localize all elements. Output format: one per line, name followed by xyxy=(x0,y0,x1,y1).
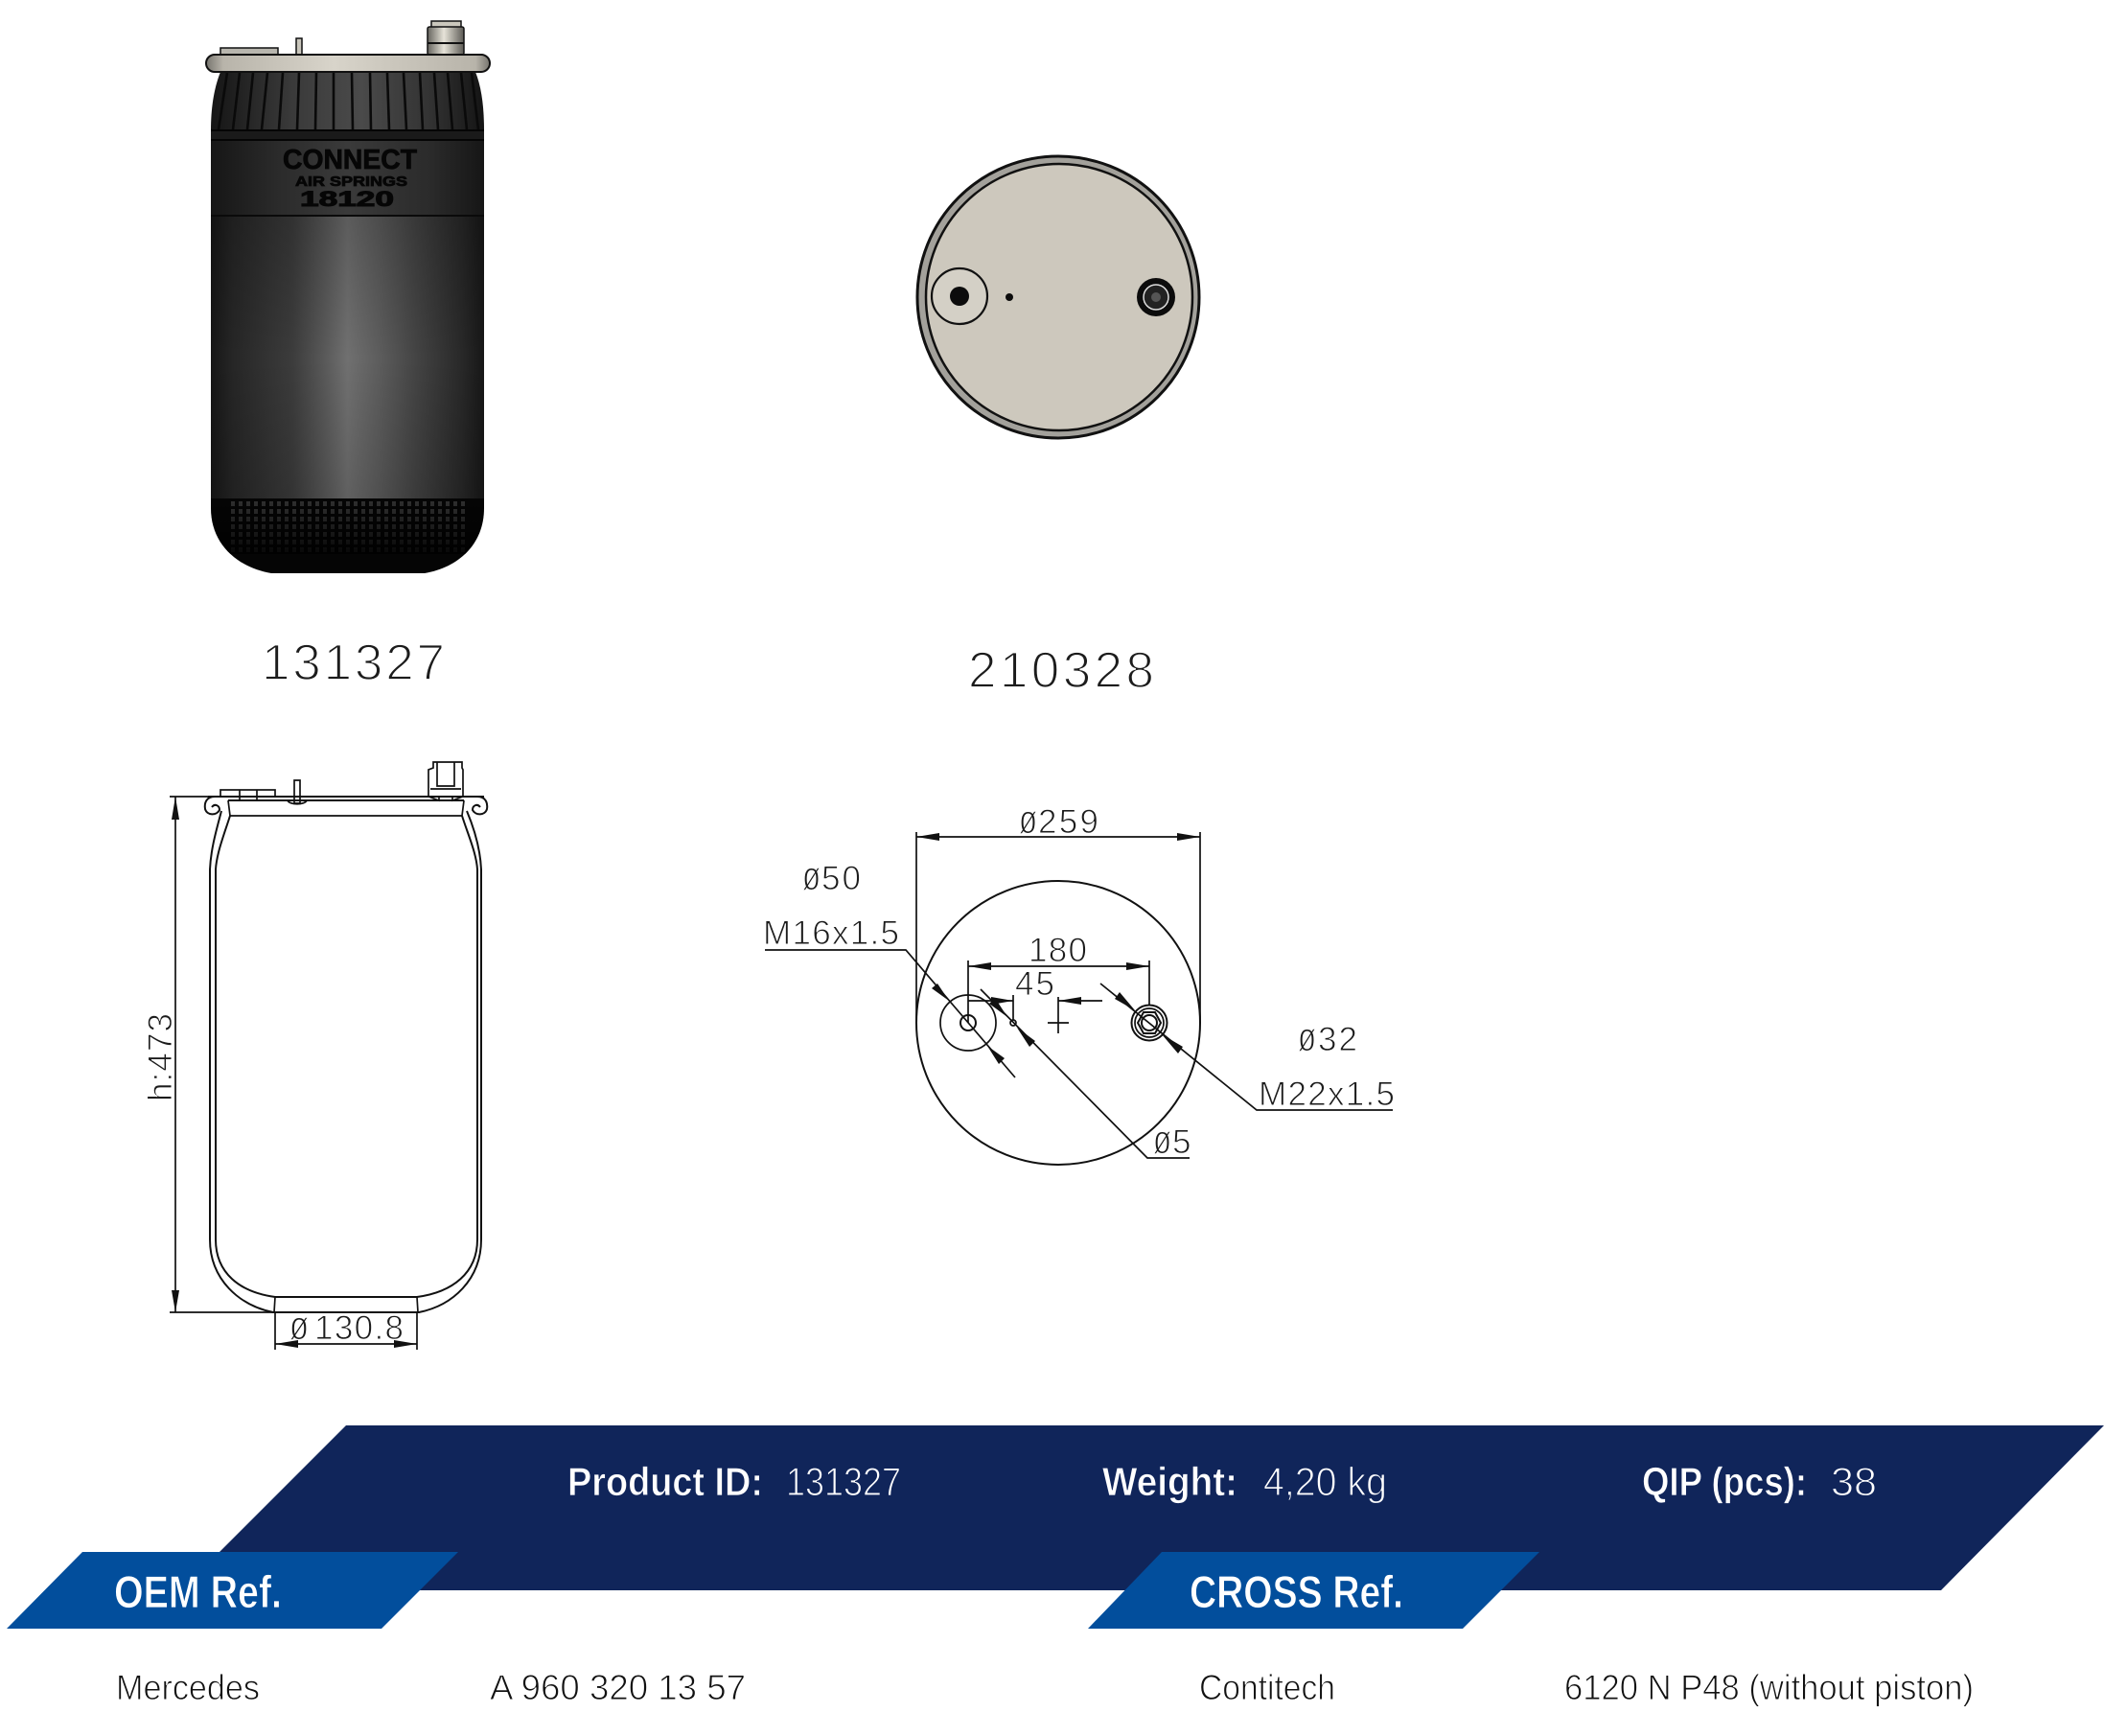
centre cross xyxy=(1048,997,1069,1033)
logo text on spring xyxy=(283,145,417,211)
part number label: 210328: 210328 xyxy=(968,642,1154,699)
height dimension h:473 xyxy=(142,797,274,1312)
leader ø5: ø xyxy=(1153,1117,1171,1162)
base dimension ø130.8: ø xyxy=(289,1303,309,1348)
leader M22x1.5 and ø32: 32 xyxy=(1318,1021,1357,1058)
inner plate xyxy=(926,164,1192,430)
air fitting xyxy=(428,21,464,55)
leader M22x1.5 and ø32: M22x1.5 xyxy=(1259,1076,1395,1113)
dimension 180 xyxy=(968,932,1149,1023)
dimension ø259: ø xyxy=(1019,797,1037,842)
leader M16x1.5 and ø50: ø xyxy=(802,853,821,898)
left port xyxy=(932,268,987,324)
dimension ø259 xyxy=(916,797,1200,1023)
plate circle xyxy=(916,881,1200,1165)
cross reference row: Contitech xyxy=(1199,1668,1335,1707)
tag: CROSS Ref.: CROSS Ref. xyxy=(1190,1566,1403,1617)
right curl xyxy=(473,797,487,814)
flange xyxy=(206,55,490,72)
OEM row xyxy=(116,1668,746,1707)
dimension drawing: top plate xyxy=(763,797,1395,1165)
spring body xyxy=(211,140,484,504)
fitting ø32 xyxy=(1131,1005,1168,1041)
qip: 38 xyxy=(1831,1459,1877,1504)
product id: 131327 xyxy=(786,1459,901,1504)
leader M16x1.5 and ø50: M16x1.5 xyxy=(763,914,899,952)
leader ø5 xyxy=(981,989,1191,1162)
dimension 180: 180 xyxy=(1029,932,1087,969)
dimension ø259: 259 xyxy=(1038,803,1098,841)
product id xyxy=(567,1459,901,1504)
leader M22x1.5 and ø32 xyxy=(1100,984,1395,1113)
top plate xyxy=(220,48,278,55)
leader M22x1.5 and ø32: ø xyxy=(1298,1014,1316,1059)
pin xyxy=(296,38,302,55)
height dimension h:473: h:473 xyxy=(142,1013,179,1101)
leader M16x1.5 and ø50: 50 xyxy=(821,860,861,897)
outline xyxy=(205,797,487,1312)
top plate and hardware xyxy=(220,762,463,804)
base dimension ø130.8: 130.8 xyxy=(314,1309,404,1347)
leader ø5: 5 xyxy=(1172,1123,1191,1161)
weight: 4,20 kg xyxy=(1263,1459,1387,1504)
right fitting xyxy=(1137,278,1175,316)
leader M16x1.5 and ø50 xyxy=(763,853,1015,1077)
dimension 45: 45 xyxy=(1015,965,1054,1003)
qip: QIP (pcs): xyxy=(1642,1459,1807,1504)
tag: CROSS Ref. xyxy=(1088,1552,1539,1629)
tag: OEM Ref. xyxy=(7,1552,458,1629)
small hole xyxy=(1006,293,1013,301)
product photo: air spring xyxy=(206,21,490,575)
logo text on spring: 18120 xyxy=(300,187,394,211)
cross reference row: 6120 N P48 (without piston) xyxy=(1564,1668,1974,1707)
ribbed upper section xyxy=(211,72,484,140)
logo band xyxy=(211,140,484,216)
outer rim xyxy=(917,156,1199,438)
port circle ø50 xyxy=(940,995,996,1051)
cross reference row xyxy=(1199,1668,1974,1707)
logo text on spring: AIR SPRINGS xyxy=(295,174,407,190)
left curl xyxy=(205,797,220,814)
weight xyxy=(1102,1459,1387,1504)
section drawing: air spring cross-section xyxy=(142,762,487,1350)
base dimension ø130.8 xyxy=(275,1303,417,1350)
info band xyxy=(181,1425,2104,1590)
logo text on spring: CONNECT xyxy=(283,145,417,175)
weight: Weight: xyxy=(1102,1459,1237,1504)
OEM row: A 960 320 13 57 xyxy=(490,1668,746,1707)
product id: Product ID: xyxy=(567,1459,763,1504)
small hole ø5 xyxy=(1010,1020,1016,1026)
tag: OEM Ref.: OEM Ref. xyxy=(114,1566,282,1617)
part number label: 131327: 131327 xyxy=(262,635,445,691)
OEM row: Mercedes xyxy=(116,1668,260,1707)
top view: plate xyxy=(917,156,1199,438)
ribbed bottom dome xyxy=(209,497,487,575)
dimension 45 xyxy=(968,965,1102,1020)
